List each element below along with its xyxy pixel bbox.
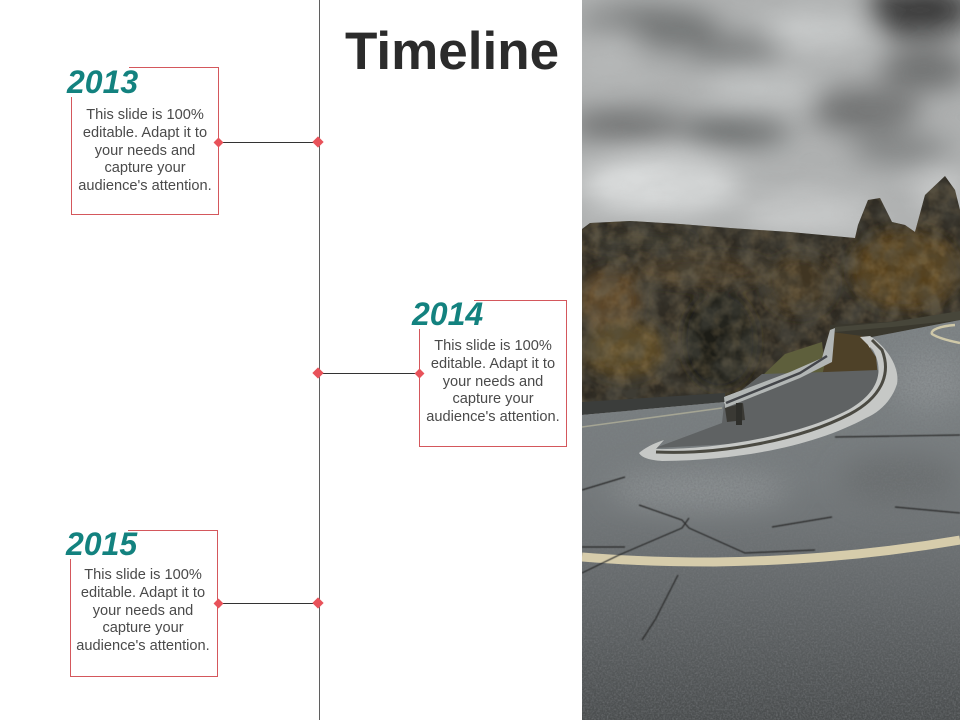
forest hillside — [578, 170, 960, 410]
grassy embankment and island — [639, 332, 897, 461]
guardrail — [582, 311, 960, 425]
description — [78, 107, 212, 194]
description: audience's attention. — [76, 638, 210, 654]
description: audience's attention. — [78, 178, 212, 194]
year: 2014 — [412, 296, 483, 332]
description — [76, 567, 210, 654]
timeline entry: 2014 — [312, 296, 567, 447]
description: your needs and — [93, 603, 193, 619]
connector dot at card — [214, 598, 223, 608]
description — [426, 338, 560, 425]
description: your needs and — [443, 374, 543, 390]
vertical timeline axis — [319, 0, 320, 720]
description: capture your — [104, 160, 186, 176]
description: capture your — [102, 620, 184, 636]
card border — [71, 67, 219, 215]
connector dot at axis — [312, 597, 324, 608]
description: editable. Adapt it to — [83, 125, 207, 141]
road surface — [582, 318, 960, 720]
description: capture your — [452, 391, 534, 407]
connector dot at card — [415, 368, 424, 378]
card border — [419, 300, 567, 447]
description: This slide is 100% — [84, 567, 202, 583]
connector — [319, 373, 420, 374]
description: audience's attention. — [426, 409, 560, 425]
connector dot at card — [214, 137, 223, 147]
description: This slide is 100% — [86, 107, 204, 123]
description: editable. Adapt it to — [431, 356, 555, 372]
timeline entry: 2013 — [66, 64, 324, 215]
road markings and cracks — [582, 325, 960, 640]
title: Timeline — [345, 22, 559, 81]
sky — [565, 0, 960, 245]
year: 2015 — [66, 526, 137, 562]
description: editable. Adapt it to — [81, 585, 205, 601]
year: 2013 — [67, 64, 138, 100]
photo: winding road under cloudy sky — [582, 0, 960, 720]
connector dot at axis — [312, 136, 324, 147]
connector — [218, 142, 319, 143]
description: your needs and — [95, 143, 195, 159]
description: This slide is 100% — [434, 338, 552, 354]
card border — [70, 530, 218, 677]
connector — [218, 603, 319, 604]
connector dot at axis — [312, 367, 324, 378]
timeline entry: 2015 — [66, 526, 324, 677]
